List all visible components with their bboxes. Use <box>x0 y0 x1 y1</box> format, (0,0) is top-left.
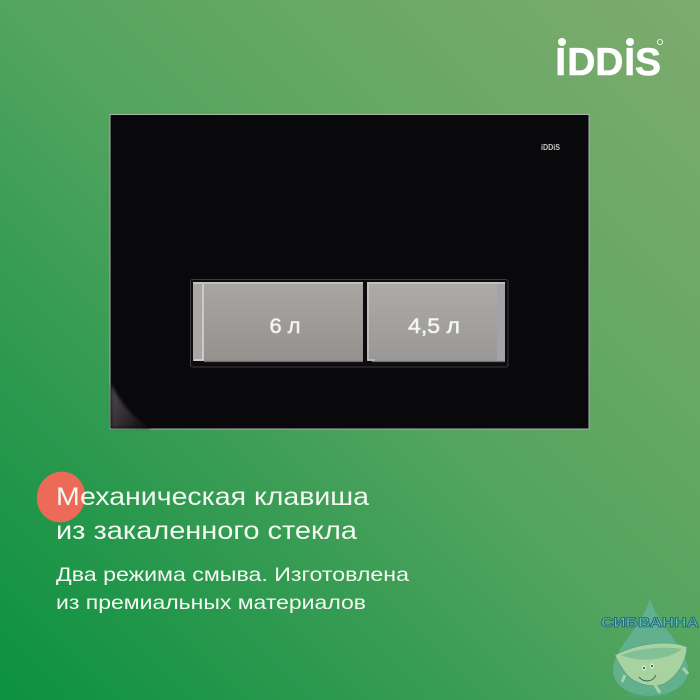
brand name: СИБВАННА <box>601 615 699 630</box>
panel: black glass flush plate <box>110 114 589 429</box>
reflection: lower left corner <box>111 384 152 428</box>
url: www.sibvanna.ru <box>626 693 673 699</box>
button: 6 l <box>193 282 363 362</box>
water drop <box>613 597 688 696</box>
heading <box>56 483 369 545</box>
body text: из премиальных материалов <box>56 592 366 614</box>
logo: IDDIS: IDDIS <box>555 41 661 84</box>
heading: Механическая клавиша <box>56 483 369 511</box>
bathtub <box>615 643 687 686</box>
button: 4,5 l <box>367 282 505 362</box>
watermark: Sibvanna logo <box>601 597 699 699</box>
heading: из закаленного стекла <box>56 517 357 545</box>
body text <box>56 564 409 614</box>
small logo on plate: iDDiS <box>541 143 561 152</box>
button: 4,5 l: 4,5 л <box>408 315 460 338</box>
body text: Два режима смыва. Изготовлена <box>56 564 409 586</box>
tub face <box>642 666 646 670</box>
accent: coral blob behind heading <box>30 465 92 529</box>
button frame <box>190 280 508 367</box>
tub feet <box>622 668 688 693</box>
button: 6 l: 6 л <box>270 315 300 338</box>
